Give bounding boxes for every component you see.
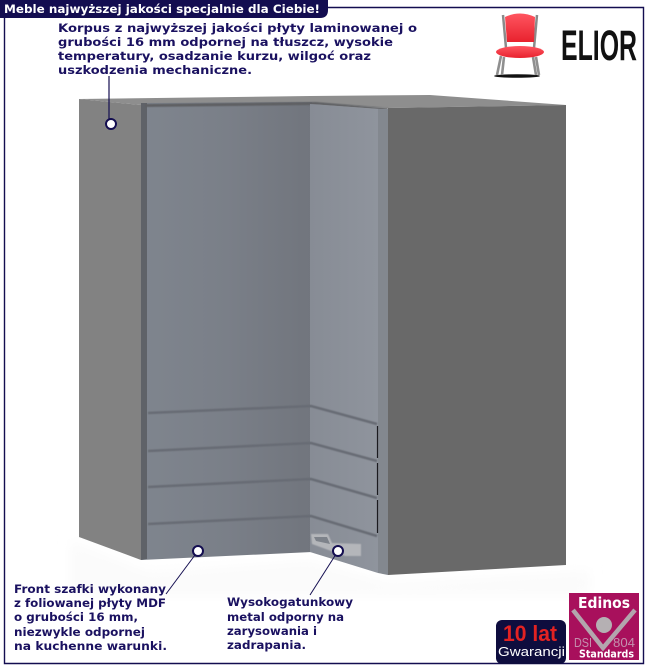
cabinet right panel — [388, 105, 566, 575]
badge: 10 lat warranty: 10 lat — [503, 621, 558, 646]
title bar — [0, 0, 328, 18]
callout: metal text: Wysokogatunkowy — [227, 595, 353, 609]
top inner shadow — [145, 102, 388, 110]
callout marker: metal — [310, 546, 343, 595]
callout: korpus text: uszkodzenia mechaniczne. — [58, 63, 252, 77]
callout: metal text: zarysowania i — [227, 624, 317, 638]
callout: front text: o grubości 16 mm, — [14, 610, 138, 624]
callout: metal text: zadrapania. — [227, 638, 306, 652]
callout: korpus text: temperatury, osadzanie kurzu, wilgoć oraz — [58, 49, 371, 63]
title text: Meble najwyższej jakości specjalnie dla Ciebie! — [4, 2, 320, 16]
callout: front text: z foliowanej płyty MDF — [14, 596, 166, 610]
cabinet back wall — [141, 102, 312, 560]
floor shadow — [70, 540, 590, 596]
cabinet right wall — [310, 104, 378, 573]
callout: korpus text — [58, 21, 417, 77]
badge: Edinos standards: DSI — [574, 636, 592, 650]
badge: 10 lat warranty: Gwarancji — [498, 644, 565, 659]
cabinet left front panel — [79, 99, 141, 560]
cabinet top surface — [79, 95, 566, 108]
badge: Edinos standards: 804 — [613, 636, 635, 650]
badge: 10 lat warranty — [496, 620, 566, 664]
callout: front text — [14, 582, 167, 653]
callout marker: front — [166, 546, 203, 594]
callout: korpus text: grubości 16 mm odpornej na tłuszcz, wysokie — [58, 35, 393, 49]
logo: chair icon — [494, 14, 544, 78]
callout: front text: niezwykle odpornej — [14, 625, 145, 639]
cabinet right wall strip — [378, 109, 388, 575]
cabinet — [79, 95, 566, 575]
callout: front text: Front szafki wykonany — [14, 582, 166, 596]
callout: metal text: metal odporny na — [227, 610, 344, 624]
badge: Edinos standards: Edinos — [578, 594, 630, 612]
shelf grooves back wall — [148, 406, 377, 536]
badge: Edinos standards — [569, 593, 639, 660]
inner frame edge — [141, 103, 147, 560]
callout: metal text — [227, 595, 353, 652]
badge: Edinos standards: Standards — [579, 648, 634, 660]
callout: front text: na kuchenne warunki. — [14, 639, 167, 653]
callout marker: korpus — [106, 76, 116, 129]
callout: korpus text: Korpus z najwyższej jakości płyty laminowanej o — [58, 21, 417, 35]
metal handle — [311, 534, 361, 556]
black slots — [376, 426, 378, 533]
